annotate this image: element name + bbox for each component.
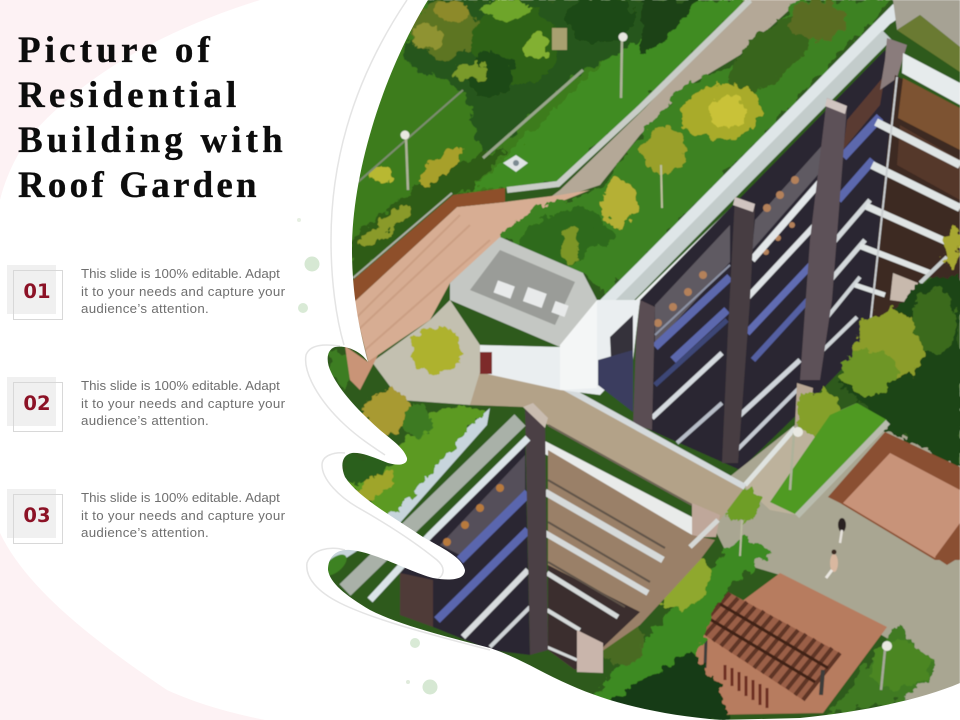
right garden trees [795,223,960,470]
list item 02: This slide is 100% editable. Adapt [81,378,280,393]
facade bays [640,50,900,470]
small tree trunk [661,165,662,208]
list item 03: audience’s attention. [81,525,209,540]
central white mechanical block [372,237,640,412]
walkway [507,0,800,205]
shrub lamp and tree trunk [740,520,892,690]
lower-left grass and trees [328,326,487,515]
right roof garden [500,0,893,293]
middle terrace [470,360,745,537]
list item 01: it to your needs and capture your [81,284,285,299]
garden paths and planter trunk [358,28,583,182]
title [18,30,287,206]
plaza [700,383,960,700]
list item 03: it to your needs and capture your [81,508,285,523]
upper lawns and trees [340,0,750,285]
lower deck and pergola [690,573,887,715]
list item 02: it to your needs and capture your [81,396,285,411]
list item 01: This slide is 100% editable. Adapt [81,266,280,281]
grass strip [770,403,888,516]
right courtyard balconies [855,0,960,335]
list item 03: This slide is 100% editable. Adapt [81,490,280,505]
right deck and benches [828,432,960,565]
list item 02: 02 [23,392,51,415]
list item 03 [7,489,285,544]
deck corner by the first lobe [345,346,378,390]
list item 02 [7,377,285,432]
list item 03: 03 [23,504,51,527]
list item 01 [7,265,285,320]
photo: residential building with roof garden [328,0,960,720]
lamp posts and drain [400,32,628,190]
list item 01: 01 [23,280,51,303]
title: Roof Garden [18,165,260,206]
list item 01: audience’s attention. [81,301,209,316]
wooden bench and deck [353,188,590,362]
list item 02: audience’s attention. [81,413,209,428]
title: Building with [18,120,287,161]
title: Picture of [18,30,214,71]
title: Residential [18,75,240,116]
left of centre pier facade [400,403,548,655]
people [826,518,846,578]
right of centre pier slabs [545,450,718,673]
bottom shrubs [562,488,938,720]
lower-left parapet [320,408,528,600]
piers [633,38,907,463]
parapet and rail [600,3,896,304]
